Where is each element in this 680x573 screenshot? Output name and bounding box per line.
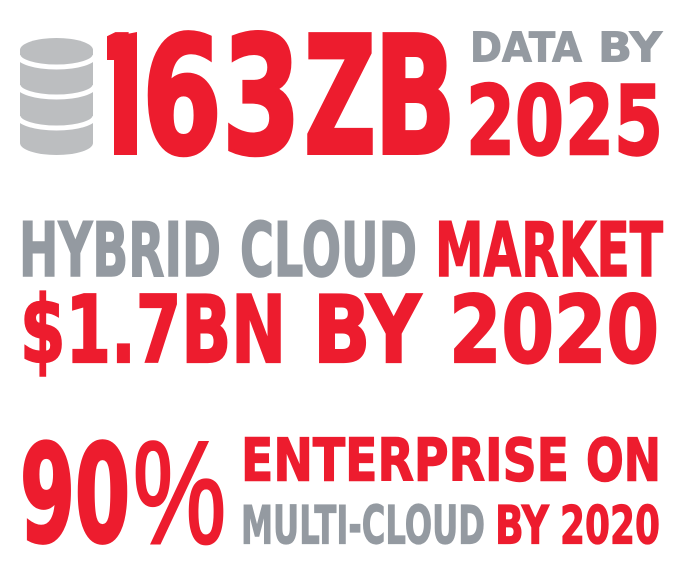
headline: 163ZB: 1 xyxy=(96,3,144,192)
headline: 163ZB: B xyxy=(374,3,456,192)
text: $1.7BN BY 2020 xyxy=(20,276,659,384)
text: 2025: 2 xyxy=(565,65,614,177)
text: DATA BY: BY xyxy=(598,24,663,72)
headline: 163ZB: Z xyxy=(304,3,376,192)
text: MULTI-CLOUD BY 2020: BY xyxy=(495,495,549,556)
heading: HYBRID CLOUD MARKET: CLOUD xyxy=(240,207,417,294)
text: 2025 xyxy=(466,65,663,177)
headline: 163ZB: 3 xyxy=(222,3,301,192)
text: MULTI-CLOUD BY 2020: MULTI-CLOUD xyxy=(241,495,485,556)
stat: 90% xyxy=(20,411,226,573)
text: 2025: 5 xyxy=(614,65,663,177)
text: 2025: 0 xyxy=(515,65,564,177)
text: 2025: 2 xyxy=(466,65,515,177)
text: $1.7BN BY 2020: BY xyxy=(313,276,422,384)
text: DATA BY: DATA xyxy=(470,24,582,72)
heading: HYBRID CLOUD MARKET: HYBRID xyxy=(19,207,221,294)
headline: 163ZB: 6 xyxy=(142,3,222,192)
stat: 90%: % xyxy=(133,411,226,573)
stat: 90%: 9 xyxy=(20,416,75,573)
text: $1.7BN BY 2020: $1.7BN xyxy=(20,276,286,384)
text: DATA BY xyxy=(470,24,663,72)
heading: HYBRID CLOUD MARKET xyxy=(19,207,663,294)
icon: database cylinder xyxy=(18,38,95,155)
stat: 90%: 0 xyxy=(75,416,130,573)
text: ENTERPRISE ON: ENTERPRISE xyxy=(241,426,569,494)
headline: 163ZB xyxy=(96,3,456,192)
